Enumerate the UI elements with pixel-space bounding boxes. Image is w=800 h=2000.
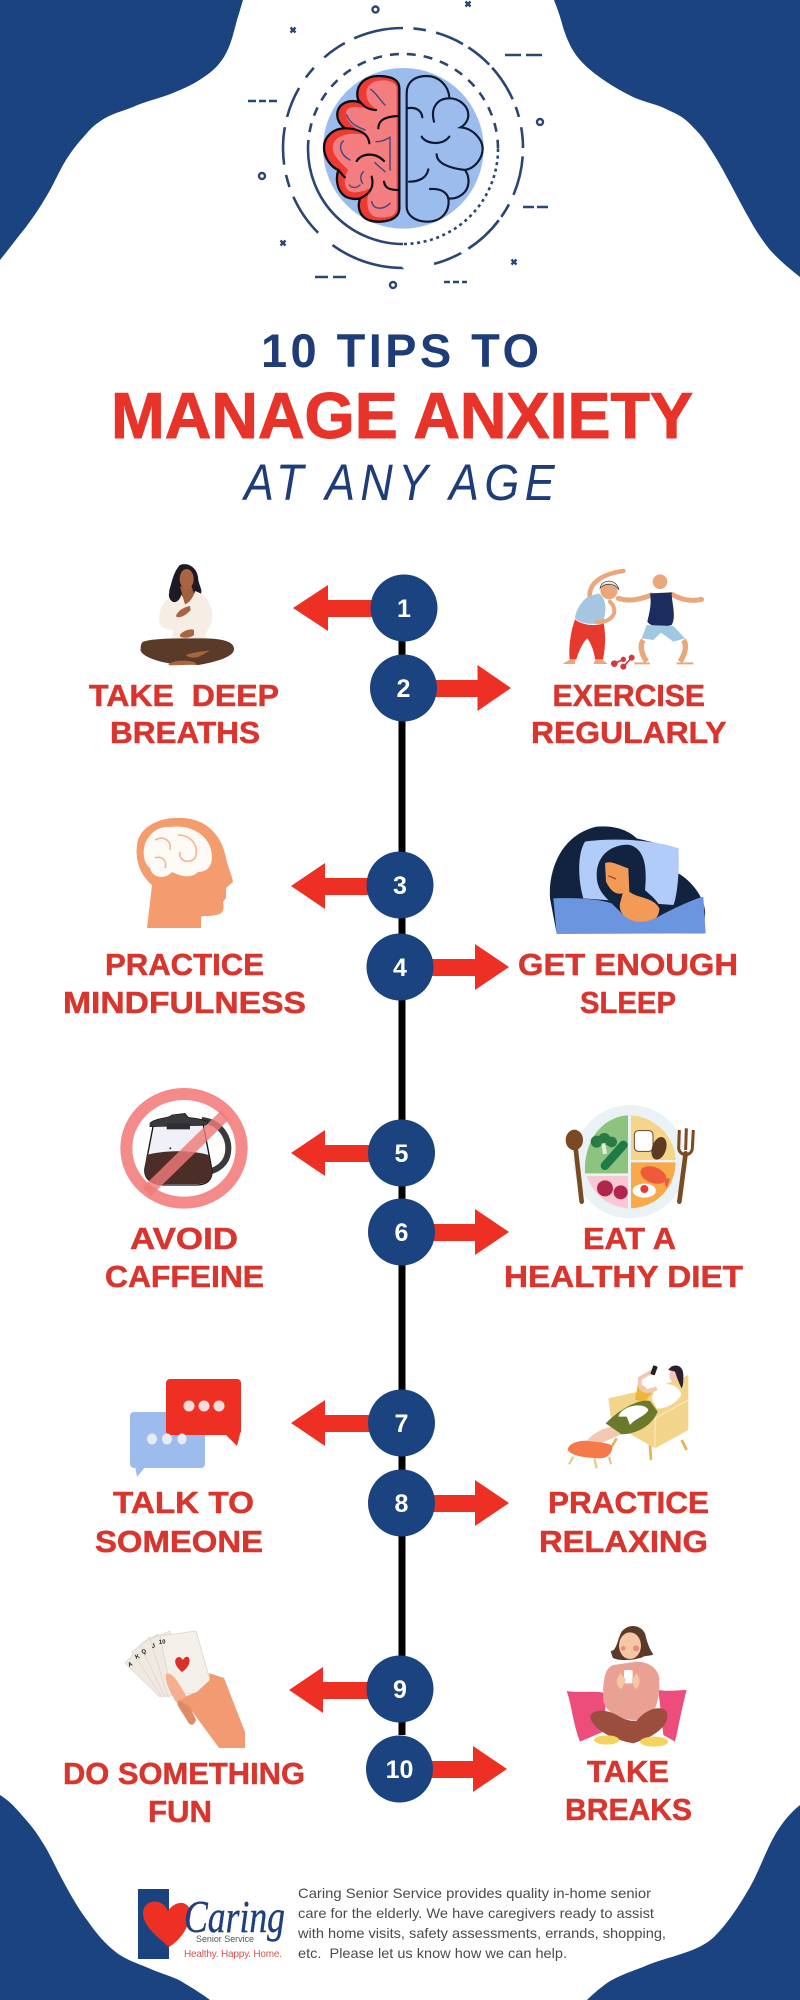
card indices: A <box>127 1661 134 1669</box>
icon: meditating woman <box>140 564 234 665</box>
badge 3 <box>366 852 434 918</box>
card indices <box>127 1639 166 1669</box>
card indices: Q <box>141 1649 147 1656</box>
tip 9 label <box>63 1756 305 1829</box>
tip 1 label: BREATHS <box>110 715 260 750</box>
tip 10 label: TAKE <box>587 1754 669 1789</box>
red bubble <box>166 1379 241 1446</box>
brain drawing <box>323 68 484 229</box>
card indices: K <box>135 1654 141 1661</box>
tip 3 label: MINDFULNESS <box>63 985 306 1020</box>
arrow 1 <box>293 585 410 631</box>
badge 7: 7 <box>395 1410 408 1438</box>
inner ring <box>308 54 498 244</box>
icon: healthy plate <box>566 1105 693 1218</box>
tip 10 label <box>565 1754 692 1827</box>
timeline vertical line <box>398 640 406 1735</box>
arrow 9 <box>289 1667 400 1713</box>
outer dashed ring <box>283 28 523 268</box>
tip 3 label: PRACTICE <box>105 947 264 982</box>
tip 8 label <box>539 1485 709 1559</box>
logo tagline: Healthy. Happy. Home. <box>184 1949 282 1960</box>
tip 6 label <box>504 1221 743 1294</box>
tip 8 label: RELAXING <box>539 1524 708 1559</box>
badge 6 <box>368 1198 435 1266</box>
icon: no coffee pot <box>126 1094 242 1203</box>
number badges <box>366 574 438 1802</box>
icon: brain with dashed rings <box>248 2 548 288</box>
tip 7 label: TALK TO <box>113 1485 254 1520</box>
badge 2 <box>370 654 437 722</box>
tip 6 label: HEALTHY DIET <box>504 1259 743 1294</box>
badge 6: 6 <box>395 1219 408 1247</box>
fanned cards <box>125 1631 210 1697</box>
tip 1 label: TAKE DEEP <box>89 678 279 713</box>
badge 9 <box>366 1656 434 1722</box>
footer description: with home visits, safety assessments, errands, shopping, <box>297 1925 666 1941</box>
arrow 5 <box>291 1130 400 1176</box>
logo blue block <box>138 1889 169 1959</box>
arrow 4 <box>400 944 509 990</box>
badge 3: 3 <box>393 872 407 900</box>
tip 7 label: SOMEONE <box>95 1524 263 1559</box>
icon: woman relaxing in armchair <box>568 1365 688 1468</box>
badge 4: 4 <box>393 954 407 982</box>
title line 2: MANAGE ANXIETY <box>111 379 693 452</box>
tip 10 label: BREAKS <box>565 1792 692 1827</box>
badge 8 <box>368 1470 435 1536</box>
hand palm <box>176 1673 245 1748</box>
icon: head with brain <box>137 818 233 928</box>
arrows <box>289 585 511 1792</box>
badge 5 <box>368 1120 435 1186</box>
background shape: bottom right <box>587 1805 800 2000</box>
floating marks <box>248 2 548 288</box>
tip 4 label <box>518 947 738 1020</box>
logo subtitle: Senior Service <box>196 1934 254 1944</box>
tip 5 label: CAFFEINE <box>105 1259 264 1294</box>
badge 7 <box>368 1390 435 1456</box>
tip 9 label: FUN <box>148 1794 212 1829</box>
icon: hand holding playing cards <box>125 1631 245 1748</box>
arrow 3 <box>291 863 400 909</box>
background shape: top right <box>554 0 800 277</box>
tip 9 label: DO SOMETHING <box>63 1756 305 1791</box>
arrow 2 <box>400 665 511 711</box>
card indices: J <box>151 1643 156 1650</box>
background shape: top left <box>0 0 243 260</box>
badge 1 <box>370 574 438 642</box>
arrow 6 <box>400 1209 509 1255</box>
logo: Caring Senior Service <box>138 1889 285 1960</box>
tip 2 label: REGULARLY <box>531 715 727 750</box>
tip 2 label <box>531 678 727 750</box>
tip 6 label: EAT A <box>583 1221 676 1256</box>
badge 1: 1 <box>397 595 411 623</box>
tip 7 label <box>95 1485 263 1559</box>
footer description <box>297 1885 666 1961</box>
tip 2 label: EXERCISE <box>552 678 705 713</box>
card indices: 10 <box>159 1639 166 1646</box>
footer description: care for the elderly. We have caregivers ready to assist <box>298 1905 654 1921</box>
tip 4 label: SLEEP <box>580 985 676 1020</box>
badge 9: 9 <box>393 1676 407 1704</box>
fingers <box>176 1698 196 1725</box>
icon: chat bubbles <box>130 1379 241 1477</box>
footer description: etc. Please let us know how we can help. <box>298 1945 567 1961</box>
logo heart <box>143 1901 191 1947</box>
icon: woman taking a break <box>567 1626 687 1747</box>
icon: seniors exercising <box>562 571 702 670</box>
icon: sleeping woman <box>550 826 706 934</box>
arrow 10 <box>400 1746 507 1792</box>
tip 1 label <box>89 678 279 750</box>
arrow 7 <box>291 1400 400 1446</box>
badge 8: 8 <box>395 1490 409 1518</box>
tip 8 label: PRACTICE <box>548 1485 709 1520</box>
blue bubble <box>130 1412 205 1477</box>
badge 10: 10 <box>386 1756 413 1784</box>
tip 5 label <box>105 1221 264 1294</box>
title <box>111 324 693 512</box>
badge 4 <box>366 934 434 1000</box>
logo wordmark: Caring <box>184 1891 285 1942</box>
arrow 8 <box>400 1480 509 1526</box>
footer description: Caring Senior Service provides quality in-home senior <box>298 1885 651 1901</box>
tip 3 label <box>63 947 306 1020</box>
badge 10 <box>366 1736 433 1802</box>
badge 5: 5 <box>395 1140 409 1168</box>
title line 3: AT ANY AGE <box>241 455 556 512</box>
background shape: bottom left <box>0 1795 210 2000</box>
thumb <box>166 1674 187 1702</box>
tip 4 label: GET ENOUGH <box>518 947 738 982</box>
title line 1: 10 TIPS TO <box>261 324 539 377</box>
heart pip <box>175 1657 190 1672</box>
tip 5 label: AVOID <box>130 1221 238 1256</box>
badge 2: 2 <box>397 675 410 703</box>
